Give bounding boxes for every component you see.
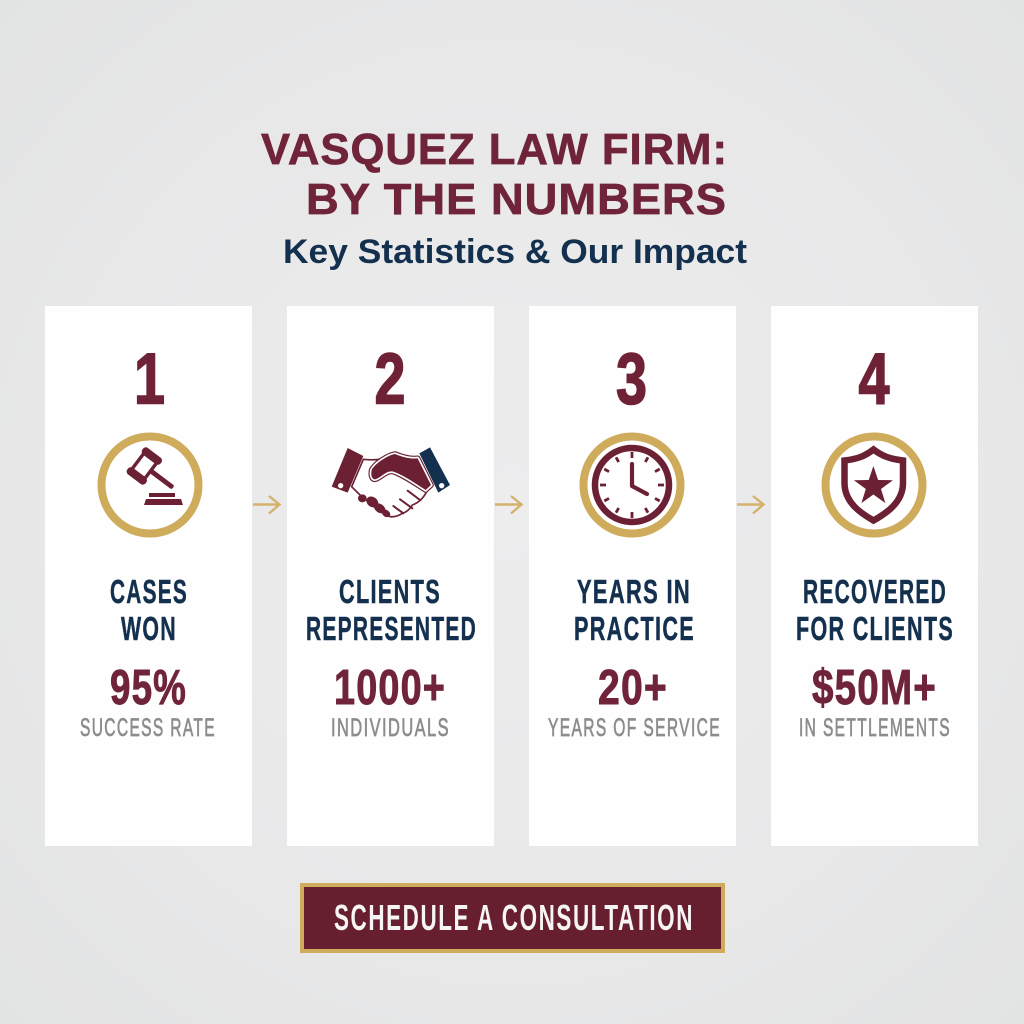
- panel: cases won: [45, 306, 252, 846]
- label: years in practice: [574, 573, 695, 647]
- label: clients represented: CLIENTS: [339, 573, 441, 610]
- step number 1: 1: [134, 340, 165, 420]
- panel: recovered for clients: [771, 306, 978, 846]
- icon: clock in gold ring: [584, 436, 680, 534]
- stat: 20+: 20+: [598, 661, 668, 715]
- label: recovered for clients: [796, 573, 954, 647]
- label: years in practice: PRACTICE: [574, 610, 695, 647]
- title: VASQUEZ LAW FIRM:: [261, 125, 728, 174]
- stat: 1000+: 1000+: [334, 661, 446, 715]
- icon: handshake: [332, 447, 450, 519]
- arrow 2 to 3: [495, 496, 522, 514]
- panel: clients represented: [287, 306, 494, 846]
- arrow 3 to 4: [737, 496, 764, 514]
- icon: shield with star in gold ring: [826, 436, 922, 534]
- stat: $50M+: $50M+: [812, 661, 937, 715]
- step number 4: 4: [858, 340, 890, 420]
- label: cases won: [110, 573, 188, 647]
- step number 3: 3: [616, 340, 647, 420]
- title: [261, 125, 728, 224]
- icon: gavel in gold ring: [102, 436, 198, 534]
- label: clients represented: REPRESENTED: [306, 610, 477, 647]
- label: cases won: CASES: [110, 573, 188, 610]
- button: schedule a consultation: [302, 885, 723, 951]
- label: recovered for clients: RECOVERED: [803, 573, 947, 610]
- arrow 1 to 2: [253, 496, 280, 514]
- caption: years of service: YEARS OF SERVICE: [548, 714, 721, 742]
- step number 2: 2: [374, 340, 406, 420]
- label: years in practice: YEARS IN: [577, 573, 691, 610]
- caption: success rate: SUCCESS RATE: [80, 714, 216, 742]
- caption: individuals: INDIVIDUALS: [331, 714, 450, 742]
- label: clients represented: [306, 573, 477, 647]
- title: BY THE NUMBERS: [306, 175, 727, 224]
- panel: years in practice: [529, 306, 736, 846]
- label: cases won: WON: [121, 610, 177, 647]
- stat: 95%: 95%: [110, 661, 187, 715]
- button: schedule a consultation: SCHEDULE A CONSULTATION: [334, 897, 694, 938]
- subtitle: Key Statistics & Our Impact: [283, 233, 747, 271]
